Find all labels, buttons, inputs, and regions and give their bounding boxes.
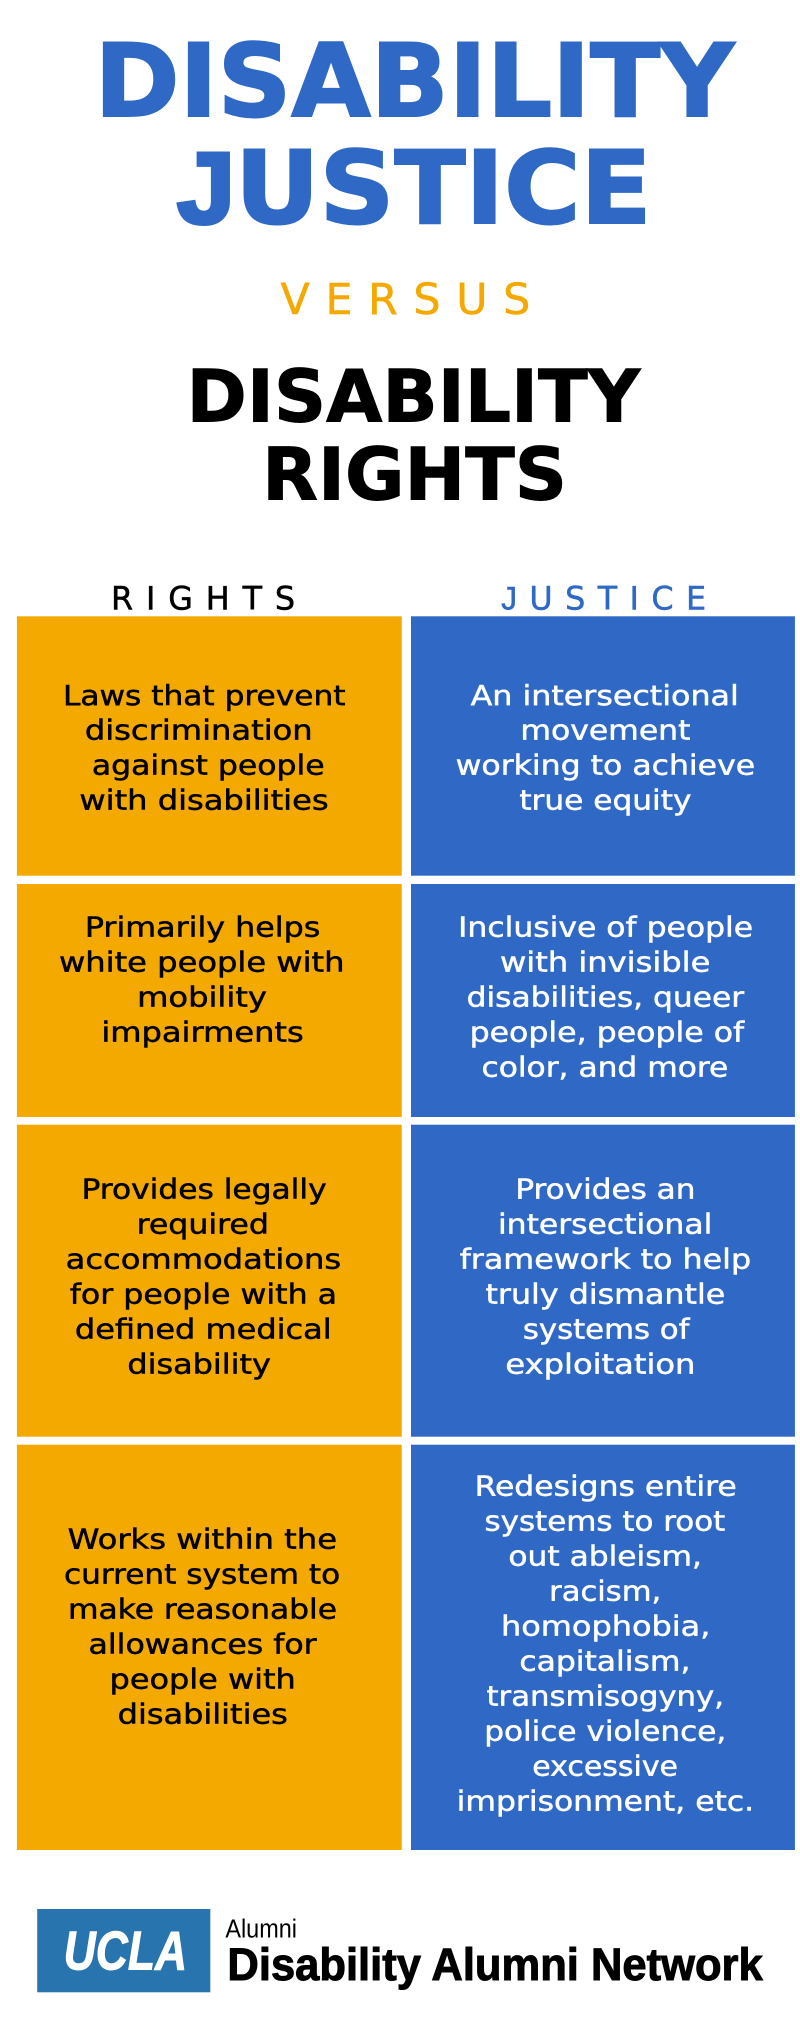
- panel: justice row 3: [411, 1125, 795, 1437]
- text: inclusive of people: with invisible: [500, 948, 710, 979]
- text: inclusive of people: color, and more: [482, 1053, 728, 1084]
- text: provides an intersectional framework: framework to help: [460, 1245, 751, 1276]
- text: primarily helps white people: mobility: [137, 983, 267, 1014]
- text: primarily helps white people: white people with: [59, 948, 345, 979]
- text: an intersectional movement: [456, 681, 755, 816]
- text: redesigns entire systems: [457, 1472, 754, 1818]
- text: redesigns entire systems: Redesigns entire: [475, 1472, 737, 1503]
- text: an intersectional movement: working to achieve: [456, 750, 755, 781]
- text: laws that prevent discrimination: with disabilities: [79, 785, 329, 816]
- column heading: rights: RIGHTS: [111, 579, 295, 617]
- text: an intersectional movement: movement: [520, 716, 691, 747]
- text: inclusive of people: people, people of: [470, 1018, 746, 1049]
- heading: Disability Rights: DISABILITY: [187, 354, 641, 439]
- text: redesigns entire systems: excessive: [532, 1752, 678, 1783]
- text: laws that prevent discrimination: against people: [92, 750, 325, 781]
- panel: rights row 1: [17, 616, 402, 876]
- text: redesigns entire systems: police violence,: [484, 1717, 726, 1748]
- text: provides legally required accommodations: [66, 1175, 341, 1381]
- panel: justice row 1: [411, 616, 795, 876]
- text: redesigns entire systems: racism,: [549, 1577, 661, 1608]
- text: Disability Alumni Network: Disability Alumni Network: [227, 1939, 763, 1990]
- text: works within the current system: current system to: [64, 1559, 340, 1590]
- text: primarily helps white people: [59, 913, 345, 1049]
- text: provides legally required accommodations: required: [137, 1210, 269, 1241]
- heading: Disability Rights: RIGHTS: [262, 432, 567, 517]
- text: works within the current system: [64, 1524, 340, 1730]
- text: redesigns entire systems: out ableism,: [508, 1542, 702, 1573]
- text: provides an intersectional framework: systems of: [523, 1315, 691, 1346]
- text: laws that prevent discrimination: discrimination: [85, 716, 313, 747]
- panel: rights row 2: [17, 884, 402, 1117]
- text: provides an intersectional framework: truly dismantle: [486, 1280, 725, 1311]
- title: Disability Justice: DISABILITY: [95, 22, 735, 140]
- text: provides legally required accommodations: defined medical: [75, 1315, 332, 1346]
- text: primarily helps white people: impairments: [101, 1018, 304, 1049]
- text: works within the current system: people with: [110, 1664, 296, 1695]
- text: redesigns entire systems: systems to root: [485, 1507, 726, 1538]
- text: works within the current system: make reasonable: [68, 1594, 337, 1625]
- text: provides legally required accommodations: Provides legally: [81, 1175, 327, 1206]
- text: provides legally required accommodations: accommodations: [66, 1245, 341, 1276]
- text: works within the current system: Works within the: [68, 1524, 337, 1555]
- subtitle: versus: VERSUS: [281, 275, 530, 325]
- text: primarily helps white people: Primarily helps: [85, 913, 320, 944]
- text: redesigns entire systems: homophobia,: [501, 1612, 710, 1643]
- text: an intersectional movement: An intersectional: [471, 681, 739, 712]
- panel: justice row 2: [411, 884, 795, 1117]
- text: works within the current system: disabilities: [118, 1699, 288, 1730]
- text: alumni: Alumni: [225, 1916, 297, 1944]
- heading: Disability Rights: [187, 354, 641, 517]
- text: an intersectional movement: true equity: [519, 785, 691, 816]
- text: redesigns entire systems: capitalism,: [519, 1647, 690, 1678]
- panel: rights row 4: [17, 1445, 402, 1850]
- text: provides an intersectional framework: intersectional: [498, 1210, 712, 1241]
- text: inclusive of people: [458, 913, 753, 1084]
- text: laws that prevent discrimination: Laws that prevent: [63, 681, 346, 712]
- text: laws that prevent discrimination: [63, 681, 346, 816]
- text: provides an intersectional framework: exploitation: [505, 1350, 695, 1381]
- text: provides legally required accommodations: for people with a: [70, 1280, 337, 1311]
- title: Disability Justice: JUSTICE: [177, 129, 652, 247]
- panel: rights row 3: [17, 1125, 402, 1437]
- text: inclusive of people: disabilities, queer: [467, 983, 745, 1014]
- logo: UCLA: UCLA: [64, 1919, 187, 1982]
- text: inclusive of people: Inclusive of people: [458, 913, 753, 944]
- text: provides an intersectional framework: [460, 1175, 751, 1381]
- text: works within the current system: allowances for: [89, 1629, 318, 1660]
- text: redesigns entire systems: transmisogyny,: [487, 1682, 724, 1713]
- logo: UCLA: [37, 1909, 210, 1992]
- text: redesigns entire systems: imprisonment, etc.: [457, 1787, 754, 1818]
- panel: justice row 4: [411, 1445, 795, 1850]
- column heading: justice: J USTICE: [501, 579, 706, 617]
- title: Disability Justice: [95, 22, 735, 247]
- text: provides an intersectional framework: Provides an: [515, 1175, 695, 1206]
- text: provides legally required accommodations: disability: [127, 1350, 271, 1381]
